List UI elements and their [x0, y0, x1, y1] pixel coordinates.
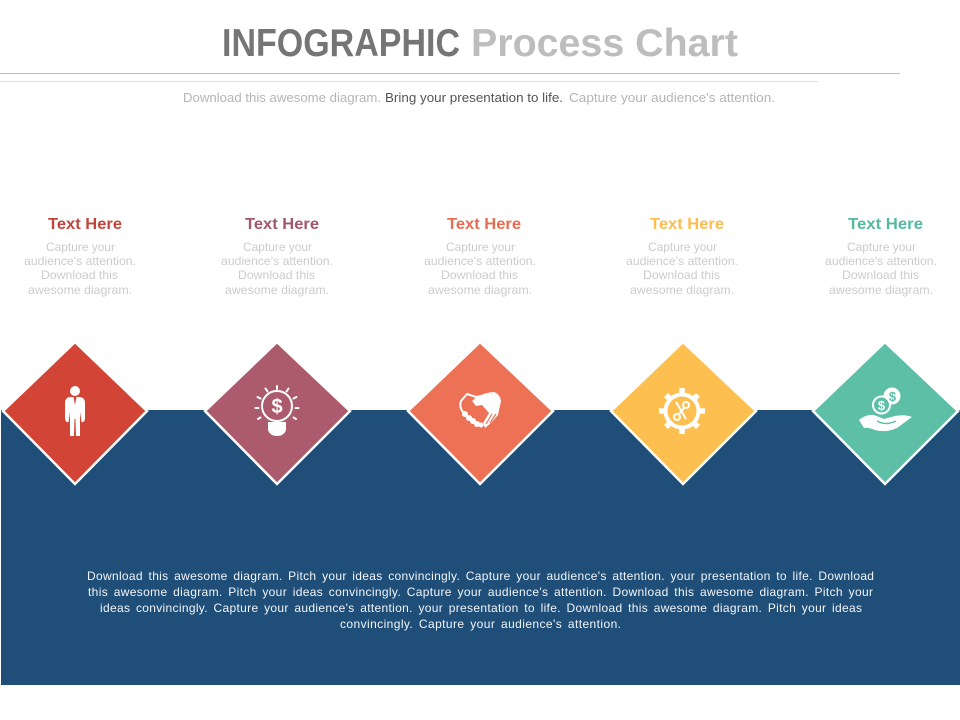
icon: person — [65, 386, 85, 436]
column 4 text: audience's attention. — [626, 254, 738, 268]
column 5 text — [825, 216, 937, 297]
icon: handshake — [460, 392, 501, 428]
column 1 text: audience's attention. — [24, 254, 136, 268]
column 4 text: Text Here — [650, 216, 724, 233]
icon: light bulb with dollar: $ — [271, 396, 283, 418]
column 5 text: Text Here — [848, 216, 923, 233]
column 5 text: Capture your — [847, 240, 916, 254]
column 3 text — [424, 216, 536, 297]
title: INFOGRAPHIC — [222, 22, 460, 65]
diamond 1 with person icon — [3, 342, 147, 484]
diamond 5 with money hand icon — [813, 342, 958, 484]
column 2 text: Capture your — [243, 240, 312, 254]
column 2 text — [221, 216, 333, 297]
subtitle — [183, 90, 775, 105]
panel: blue band — [1, 410, 960, 685]
column 1 text: Capture your — [46, 240, 115, 254]
subtitle: Bring your presentation to life. — [385, 90, 563, 105]
column 4 text: Capture your — [648, 240, 717, 254]
column 4 text: Download this — [643, 268, 720, 282]
title — [222, 22, 738, 65]
column 3 text: awesome diagram. — [428, 283, 532, 297]
diamond 3 with handshake icon — [408, 342, 553, 484]
icon: hand with coins: $ — [889, 389, 897, 404]
column 3 text: Text Here — [447, 216, 521, 233]
subtitle: Capture your audience's attention. — [569, 90, 775, 105]
body text: this awesome diagram. Pitch your ideas convincingly. Capture your audience's attention. Download this awesome diagram. Pitch your — [88, 585, 873, 599]
diamond 2 with idea icon — [205, 342, 350, 484]
column 4 text — [626, 216, 738, 297]
body text: ideas convincingly. Capture your audience's attention. your presentation to life. Download this awesome diagram. Pitch your ideas — [100, 601, 862, 615]
column 5 text: audience's attention. — [825, 254, 937, 268]
body text: convincingly. Capture your audience's attention. — [340, 617, 621, 631]
column 3 text: Download this — [441, 268, 518, 282]
body text: Download this awesome diagram. Pitch your ideas convincingly. Capture your audience's attention. your presentation to life. Download — [87, 569, 874, 583]
body text — [87, 569, 874, 631]
icon: hand with coins — [859, 388, 912, 431]
column 3 text: Capture your — [446, 240, 515, 254]
column 4 text: awesome diagram. — [630, 283, 734, 297]
column 5 text: awesome diagram. — [829, 283, 933, 297]
column 2 text: Download this — [238, 268, 315, 282]
title: Process Chart — [471, 22, 738, 65]
column 2 text: audience's attention. — [221, 254, 333, 268]
column 1 text: awesome diagram. — [28, 283, 132, 297]
column 1 text — [24, 216, 136, 297]
icon: light bulb with dollar — [256, 386, 298, 436]
icon: gear with tools — [659, 388, 705, 434]
column 5 text: Download this — [842, 268, 919, 282]
column 1 text: Download this — [41, 268, 118, 282]
column 3 text: audience's attention. — [424, 254, 536, 268]
diamond 4 with gear icon — [611, 342, 756, 484]
column 2 text: awesome diagram. — [225, 283, 329, 297]
icon: hand with coins: $ — [878, 398, 886, 413]
column 2 text: Text Here — [245, 216, 319, 233]
column 1 text: Text Here — [48, 216, 122, 233]
subtitle: Download this awesome diagram. — [183, 90, 381, 105]
